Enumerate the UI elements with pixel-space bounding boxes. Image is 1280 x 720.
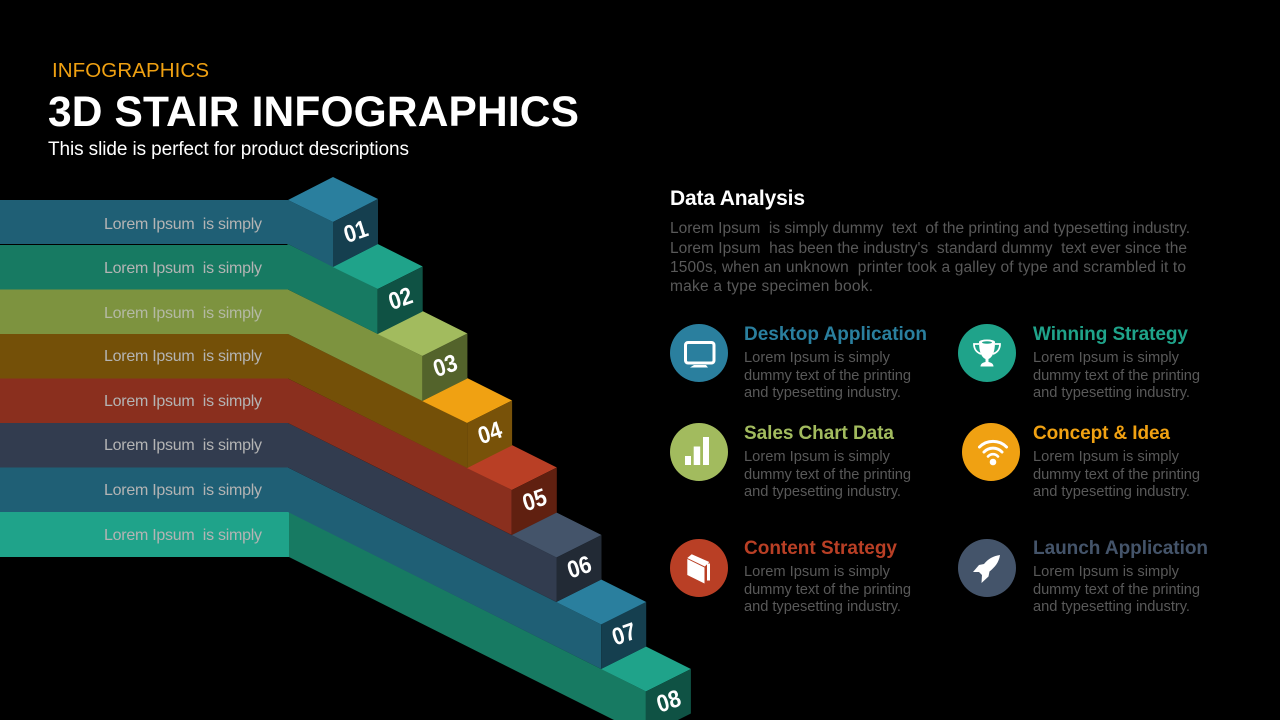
step 03 (0, 290, 467, 401)
item: sales chart data: and typesetting industry. (744, 484, 901, 500)
item: concept and idea: dummy text of the printing (1033, 467, 1200, 483)
item: content strategy: Lorem Ipsum is simply (744, 564, 891, 580)
icon: wifi (962, 423, 1020, 481)
eyebrow heading: INFOGRAPHICS (52, 59, 209, 82)
step 05: 05 (519, 482, 550, 517)
item: desktop application: dummy text of the printing (744, 368, 911, 384)
item: concept and idea: Concept & Idea (1033, 423, 1170, 444)
step 06: Lorem Ipsum is simply (104, 437, 262, 454)
step 05 (0, 378, 557, 535)
icon: bar chart (670, 423, 728, 481)
step 03: Lorem Ipsum is simply (104, 305, 262, 322)
subtitle: This slide is perfect for product descriptions (48, 139, 409, 160)
step 04 (0, 334, 512, 468)
paragraph: data analysis: Lorem Ipsum is simply dummy text of the printing and typesetting industry. (670, 220, 1190, 237)
step 02: Lorem Ipsum is simply (104, 260, 262, 277)
paragraph: data analysis: 1500s, when an unknown printer took a galley of type and scrambled it to (670, 259, 1186, 276)
step 01 (0, 177, 378, 267)
step 06 (0, 423, 602, 602)
step 02: 02 (385, 281, 416, 315)
step 08 (0, 512, 691, 720)
step 07 (0, 468, 646, 669)
step 03: 03 (430, 348, 461, 382)
item: sales chart data: dummy text of the printing (744, 467, 911, 483)
step 08: Lorem Ipsum is simply (104, 527, 262, 544)
item: winning strategy: Lorem Ipsum is simply (1033, 350, 1180, 366)
item: desktop application: Lorem Ipsum is simply (744, 350, 891, 366)
item: concept and idea: and typesetting industry. (1033, 484, 1190, 500)
paragraph: data analysis (670, 220, 1190, 295)
item: winning strategy: and typesetting industry. (1033, 385, 1190, 401)
icon: monitor (670, 324, 728, 382)
section heading: data analysis: Data Analysis (670, 187, 805, 210)
item: launch application: and typesetting industry. (1033, 599, 1190, 615)
icon: rocket (958, 539, 1016, 597)
paragraph: data analysis: Lorem Ipsum has been the industry's standard dummy text ever since the (670, 240, 1187, 257)
item: winning strategy: Winning Strategy (1033, 324, 1188, 345)
item: content strategy (670, 538, 911, 615)
step 04: Lorem Ipsum is simply (104, 348, 262, 365)
step 01: 01 (340, 214, 371, 248)
step 05: Lorem Ipsum is simply (104, 393, 262, 410)
item: sales chart data: Sales Chart Data (744, 423, 894, 444)
title: 3D STAIR INFOGRAPHICS (48, 89, 579, 136)
icon: trophy (958, 324, 1016, 382)
item: sales chart data: Lorem Ipsum is simply (744, 449, 891, 465)
item: launch application (958, 538, 1208, 615)
paragraph: data analysis: make a type specimen book. (670, 278, 873, 295)
step 07: 07 (608, 617, 639, 651)
step 04: 04 (474, 415, 505, 450)
step 07: Lorem Ipsum is simply (104, 482, 262, 499)
item: desktop application: and typesetting industry. (744, 385, 901, 401)
item: desktop application (670, 324, 927, 401)
item: launch application: dummy text of the printing (1033, 582, 1200, 598)
item: desktop application: Desktop Application (744, 324, 927, 345)
item: sales chart data (670, 423, 911, 500)
icon: book (670, 539, 728, 597)
step 06: 06 (564, 550, 595, 584)
item: concept and idea: Lorem Ipsum is simply (1033, 449, 1180, 465)
item: content strategy: Content Strategy (744, 538, 897, 559)
item: launch application: Lorem Ipsum is simply (1033, 564, 1180, 580)
item: winning strategy (958, 324, 1200, 401)
item: content strategy: and typesetting industry. (744, 599, 901, 615)
item: concept and idea (962, 423, 1200, 500)
item: winning strategy: dummy text of the printing (1033, 368, 1200, 384)
step 01: Lorem Ipsum is simply (104, 216, 262, 233)
item: launch application: Launch Application (1033, 538, 1208, 559)
step 08: 08 (653, 684, 684, 718)
step 02 (0, 244, 423, 334)
item: content strategy: dummy text of the printing (744, 582, 911, 598)
